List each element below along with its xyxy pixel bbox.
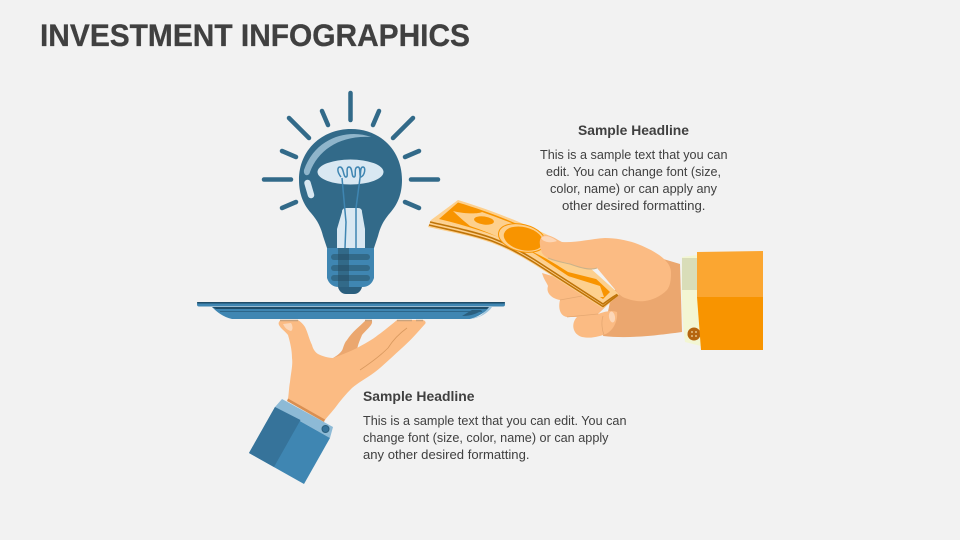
cuff button: [322, 426, 329, 432]
body text: [540, 148, 728, 213]
cuff button: [688, 328, 700, 340]
text block: bottom: [363, 388, 627, 462]
stack edges: [428, 220, 619, 308]
glass stem: [337, 208, 365, 248]
sleeve top: [697, 251, 763, 297]
thumb nail: [541, 236, 557, 242]
body text: color, name) or can apply any: [550, 182, 718, 196]
top bill: [431, 200, 618, 302]
back finger: [333, 321, 372, 358]
screw base: [327, 248, 374, 287]
headline: Sample Headline: [363, 388, 475, 404]
thumb edge: [548, 258, 597, 269]
headline: Sample Headline: [578, 122, 689, 138]
bill printed area: [439, 202, 610, 299]
body text: This is a sample text that you can: [540, 148, 728, 162]
icon: thumb and upper palm: [540, 235, 671, 301]
icon: tray: [197, 302, 505, 319]
icon: money stack: [428, 200, 619, 308]
wrist shadow: [287, 398, 325, 422]
text block: top right: [540, 122, 728, 213]
thumb nail: [283, 323, 292, 331]
body text: other desired formatting.: [562, 199, 706, 213]
icon: upper hand holding money: [542, 258, 682, 338]
body text: change font (size, color, name) or can apply: [363, 431, 609, 445]
title: INVESTMENT INFOGRAPHICS: [40, 17, 470, 53]
sleeve bottom: [697, 297, 763, 350]
palm and fingers: [279, 320, 426, 420]
fingertip shade: [280, 320, 423, 322]
finger nail: [608, 311, 616, 323]
base threads: [334, 257, 367, 278]
bill light ornaments: [453, 211, 600, 280]
crease: [360, 328, 407, 370]
lower palm shadow: [603, 258, 682, 337]
filament window: [318, 160, 384, 184]
body text: any other desired formatting.: [363, 448, 530, 462]
icon: lower hand holding tray: [279, 320, 426, 422]
bulb glass: [299, 129, 402, 248]
glass highlights: [304, 134, 371, 175]
body text: This is a sample text that you can edit. You can: [363, 414, 627, 428]
icon: light rays: [264, 93, 438, 208]
filament: [338, 167, 365, 248]
body text: [363, 414, 627, 462]
sleeve: [249, 407, 330, 484]
shirt cuff: [682, 255, 701, 346]
lower fingers: [542, 273, 617, 338]
finger separators: [560, 296, 604, 335]
body text: edit. You can change font (size,: [546, 165, 721, 179]
icon: blue sleeve: [249, 399, 333, 484]
bulb tip: [338, 287, 362, 294]
icon: orange sleeve: [682, 251, 763, 350]
icon: light bulb: [299, 129, 402, 294]
shirt cuff: [275, 399, 333, 438]
